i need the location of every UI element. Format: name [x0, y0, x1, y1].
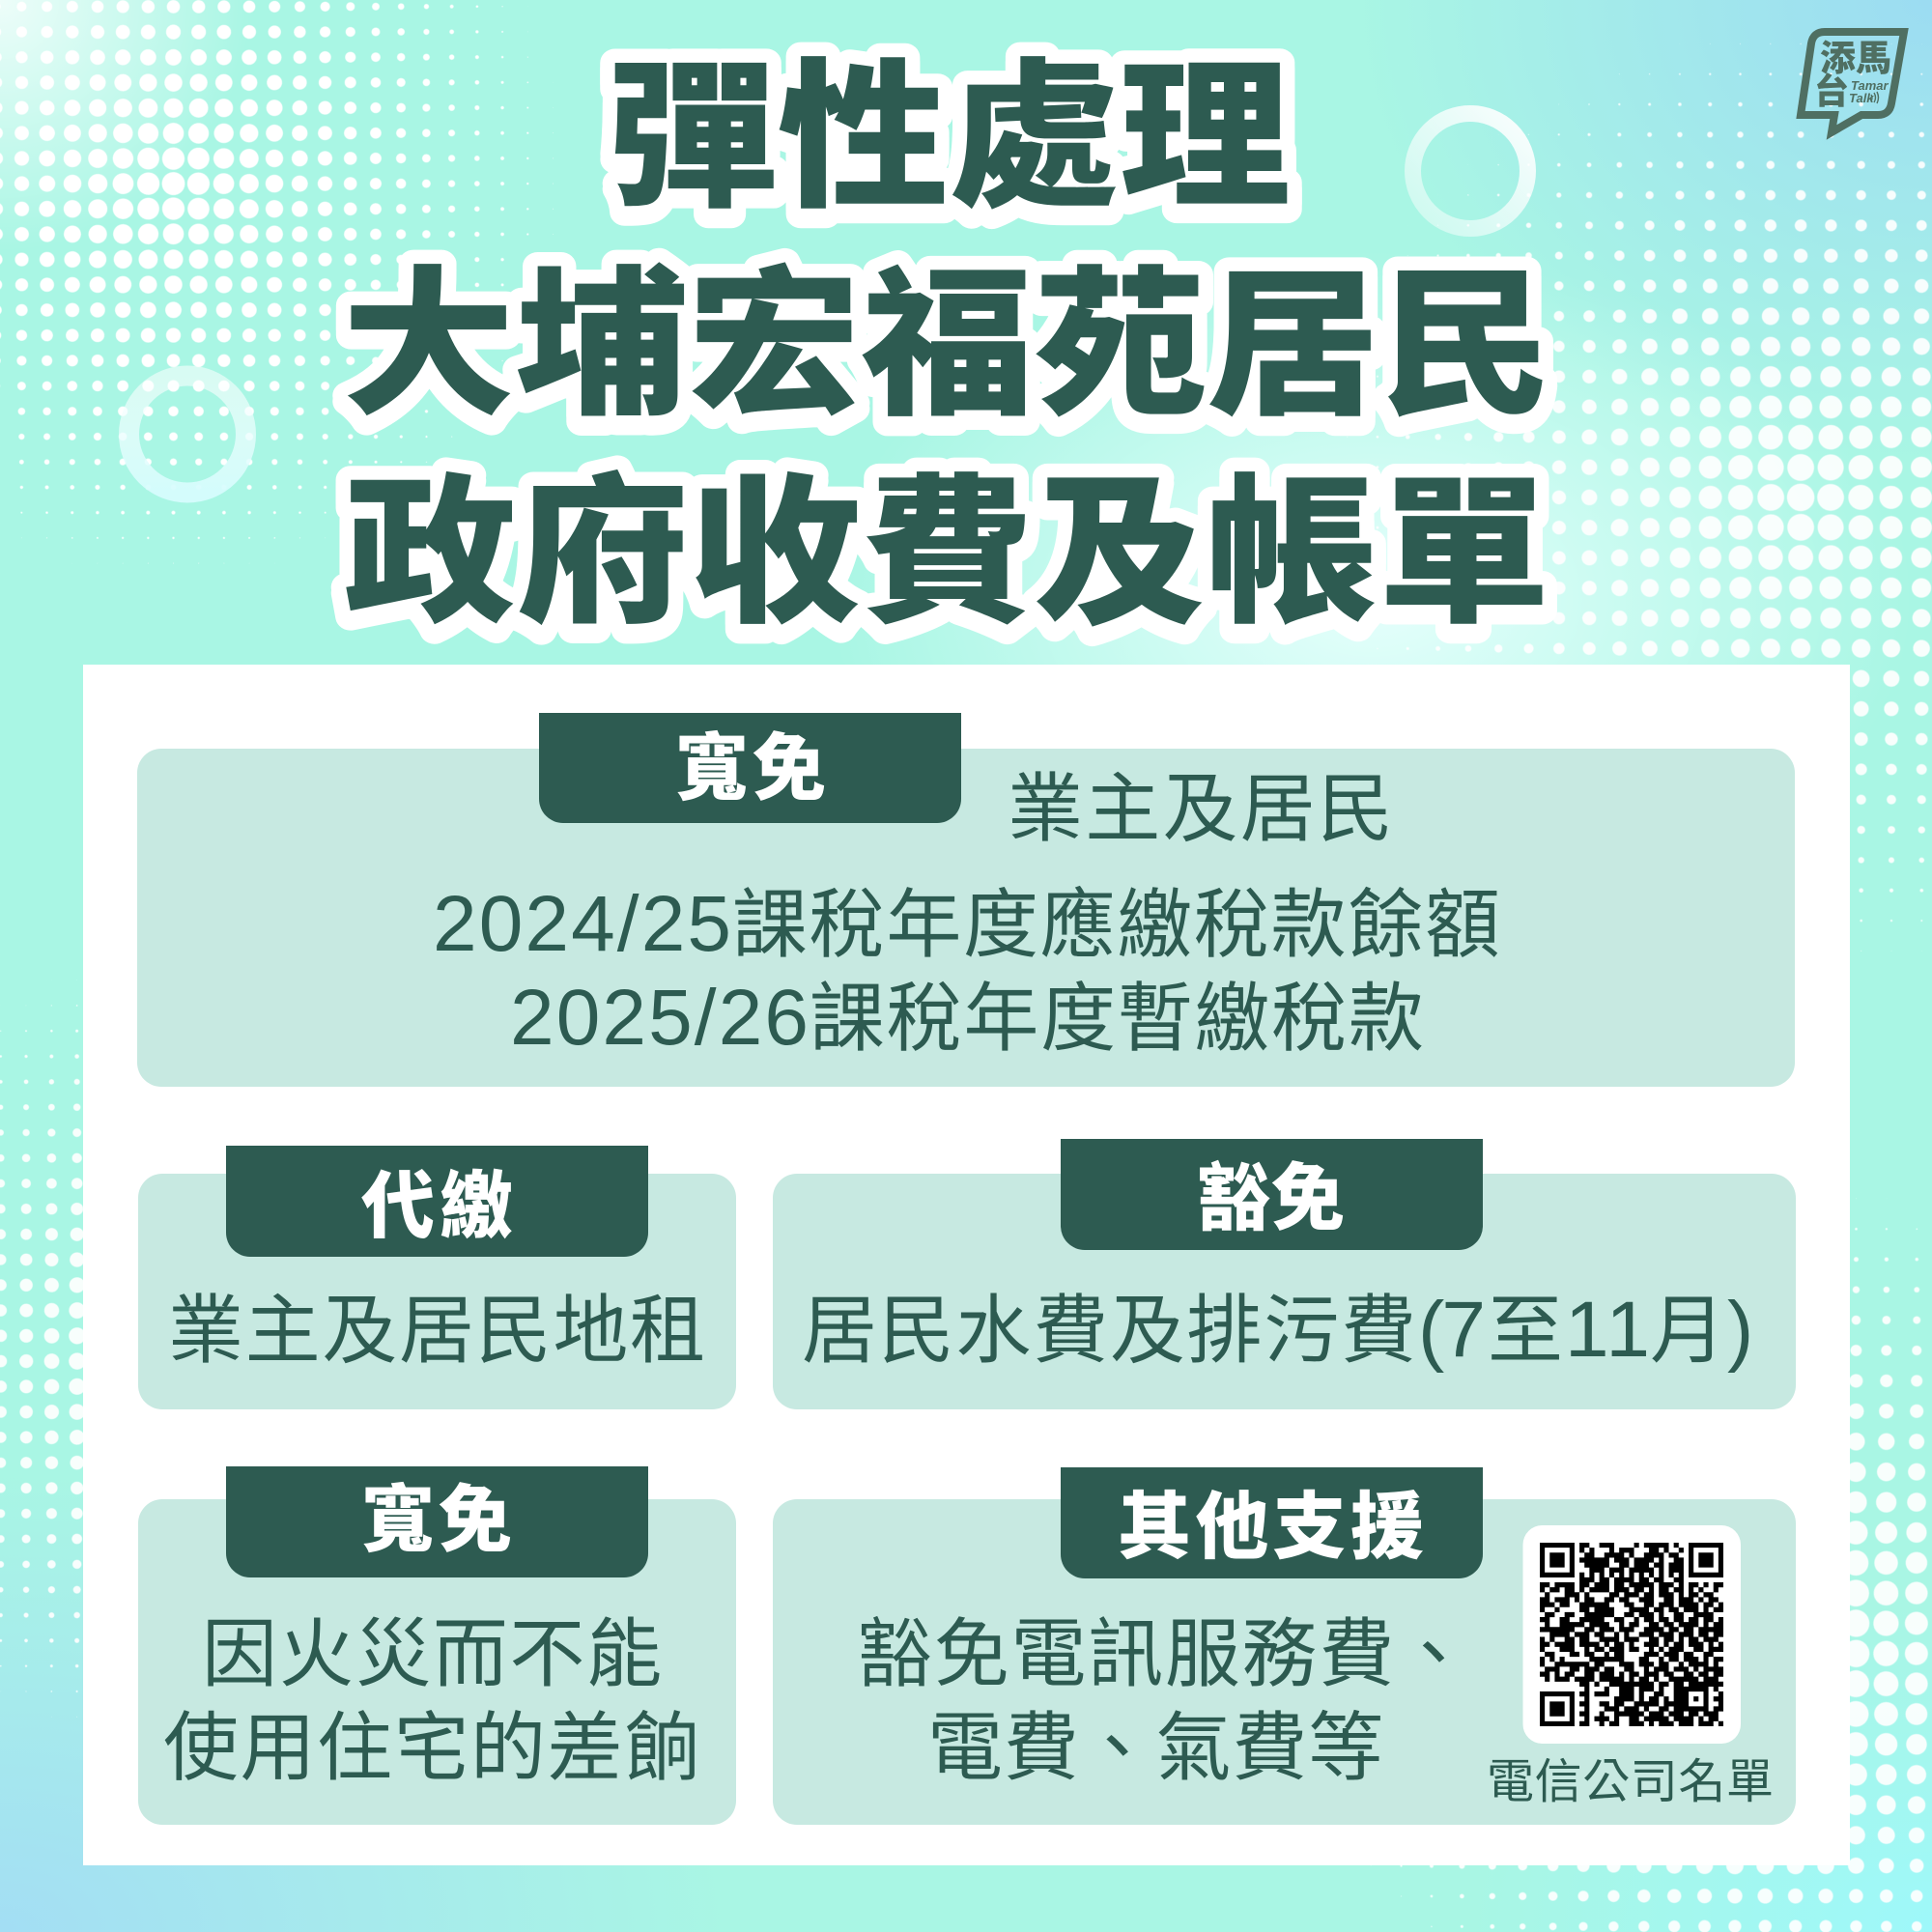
title: 政府收費及帳單	[344, 422, 1550, 655]
text: 居民水費及排污費: 11	[1565, 1286, 1650, 1374]
decorative ring: upper right	[1412, 114, 1528, 228]
title: 大埔宏福苑居民	[342, 214, 1552, 447]
logo: Tamar Talk speech bubble: 台	[1814, 64, 1849, 114]
tab: 寬免: 寬免	[675, 709, 826, 815]
decorative ring: left	[129, 376, 245, 493]
text: 居民水費及排污費: 居民水費及排污費	[802, 1288, 1416, 1373]
text: 業主及居民: 業主及居民	[1008, 766, 1393, 851]
text: 2024/25 tax line: 2024/25	[433, 880, 731, 968]
tab: 豁免: 豁免	[1197, 1139, 1345, 1245]
text: 因火災而不能: 因火災而不能	[202, 1611, 662, 1696]
white content panel	[83, 665, 1850, 1865]
tab: 其他支援	[1061, 1467, 1483, 1578]
title: 彈性處理	[607, 7, 1291, 240]
panel: 豁免 water	[773, 1139, 1796, 1409]
tab: 豁免	[1061, 1139, 1483, 1250]
text: 居民水費及排污費: 至	[1488, 1288, 1563, 1373]
text: 居民水費及排污費: (7	[1418, 1286, 1486, 1374]
tab: 代繳	[226, 1146, 648, 1257]
panel: 其他支援	[773, 1467, 1796, 1825]
text: 使用住宅的差餉: 使用住宅的差餉	[163, 1705, 699, 1790]
QR code card	[1522, 1525, 1741, 1744]
tab: 寬免	[226, 1461, 648, 1577]
panel: 寬免 rent	[138, 1461, 736, 1825]
tab: 代繳: 代繳	[361, 1147, 513, 1253]
logo: Tamar Talk speech bubble: 添馬	[1820, 29, 1891, 81]
text: 電費、氣費等: 電費、氣費等	[927, 1705, 1383, 1790]
panel: 代繳	[138, 1146, 736, 1409]
tab: 其他支援: 其他支援	[1118, 1467, 1424, 1574]
text: 業主及居民地租: 業主及居民地租	[168, 1288, 705, 1373]
logo: Tamar Talk speech bubble: Talk	[1849, 91, 1874, 105]
text: 居民水費及排污費: )	[1727, 1286, 1753, 1374]
text: 2024/25 tax line: 課稅年度應繳稅款餘額	[732, 882, 1500, 967]
tab: 寬免: 寬免	[361, 1461, 512, 1567]
text: 電信公司名單: 電信公司名單	[1487, 1756, 1774, 1808]
tab: 寬免	[539, 709, 961, 823]
panel: 寬免 tax	[137, 709, 1795, 1087]
logo: Tamar Talk speech bubble: Tamar	[1851, 78, 1889, 93]
logo: Tamar Talk speech bubble	[1801, 29, 1904, 132]
title	[342, 7, 1552, 655]
text: 2025/26 tax line: 2025/26	[510, 974, 809, 1062]
text: 居民水費及排污費: 月	[1650, 1288, 1725, 1373]
text: 2025/26 tax line: 課稅年度暫繳稅款	[810, 976, 1424, 1061]
text: 豁免電訊服務費: 豁免電訊服務費、	[857, 1611, 1471, 1696]
